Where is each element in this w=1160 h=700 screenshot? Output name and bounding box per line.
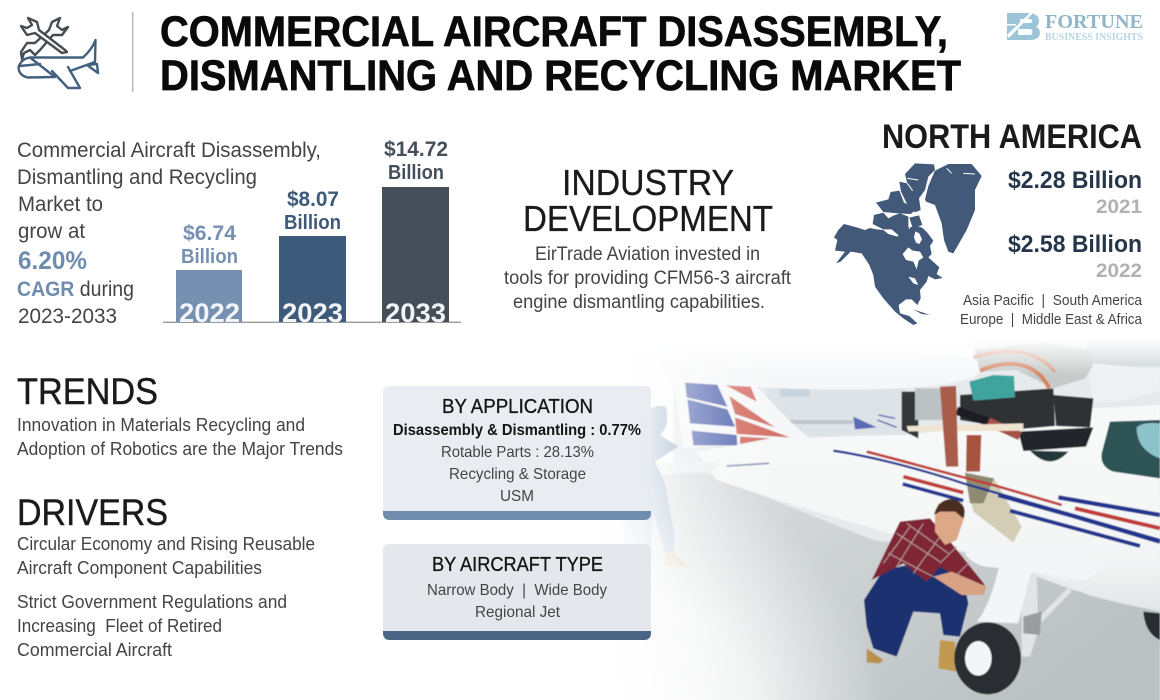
text block: market growth statement: CAGR during (17, 277, 134, 301)
text block: drivers: Commercial Aircraft (17, 639, 172, 660)
text block: market growth statement: 2023-2033 (18, 304, 117, 328)
bar: 2033: 2033 (385, 298, 446, 328)
fuselage stripes (833, 451, 1160, 540)
divider (132, 12, 133, 92)
panel: by aircraft type (383, 544, 651, 640)
text block: drivers (17, 533, 315, 660)
text block: drivers: Strict Government Regulations and (17, 591, 287, 612)
text block: industry development detail: engine dismantling capabilities. (513, 292, 765, 313)
bar: 2023: $8.07 (287, 188, 339, 211)
icon: wrenches crossed above an aircraft (19, 18, 98, 88)
heading: industry development: INDUSTRY (562, 162, 734, 203)
text block: market growth statement: Dismantling and Recycling (17, 165, 257, 189)
logo: Fortune Business Insights (1007, 11, 1143, 43)
text block: drivers: Aircraft Component Capabilities (17, 557, 262, 578)
bar: 2022: $6.74 (183, 222, 236, 245)
panel: by aircraft type: BY AIRCRAFT TYPE (432, 554, 603, 576)
text block: market growth statement: grow at (18, 219, 85, 243)
panel: by aircraft type: Narrow Body | Wide Body (427, 582, 607, 599)
text block: drivers: Circular Economy and Rising Reusable (17, 533, 315, 554)
text block: other regions: Asia Pacific | South America (963, 293, 1143, 309)
title: COMMERCIAL AIRCRAFT DISASSEMBLY, (160, 8, 948, 56)
panel: by application: USM (500, 488, 534, 505)
panel: by application: Recycling & Storage (449, 466, 586, 483)
stat: 2022 value: $2.58 Billion (1008, 231, 1142, 258)
panel: by application: Disassembly & Dismantling : 0.77% (393, 422, 641, 439)
text block: industry development detail: EirTrade Aviation invested in (535, 244, 760, 265)
photo: mechanic repairing a light aircraft in a hangar (597, 337, 1160, 700)
text block: market growth statement: 6.20% (18, 247, 87, 275)
text block: market growth statement (17, 138, 321, 328)
heading: trends: TRENDS (17, 371, 158, 412)
logo: Fortune Business Insights: FORTUNE (1045, 11, 1143, 33)
heading: drivers: DRIVERS (17, 492, 168, 533)
panel: by aircraft type: Regional Jet (475, 604, 561, 621)
text block: other regions (960, 293, 1143, 328)
bar: 2033: $14.72 (384, 138, 448, 161)
heading: industry development: DEVELOPMENT (523, 198, 773, 239)
text block: drivers: Increasing Fleet of Retired (17, 615, 222, 636)
woman in background (641, 406, 678, 553)
map: North America and Greenland (834, 163, 982, 325)
title: DISMANTLING AND RECYCLING MARKET (160, 52, 961, 100)
bar: 2033: Billion (388, 161, 444, 184)
text block: market growth statement: Market to (18, 192, 103, 216)
bar: 2033 (382, 138, 449, 328)
cockpit window (1101, 420, 1160, 478)
panel: by application (383, 386, 651, 520)
text block: trends (17, 414, 343, 459)
stat: 2021 value: 2021 (1096, 197, 1142, 218)
stat: 2022 value (1008, 231, 1142, 282)
stat: 2021 value: $2.28 Billion (1008, 167, 1142, 194)
text block: industry development detail (504, 244, 792, 313)
bar: 2022 (176, 222, 242, 328)
text block: trends: Adoption of Robotics are the Major Trends (17, 438, 343, 459)
panel: by application: BY APPLICATION (442, 396, 593, 418)
wheel fairing and strut (965, 552, 1000, 568)
text block: trends: Innovation in Materials Recycling and (17, 414, 305, 435)
text block: other regions: Europe | Middle East & Africa (960, 312, 1143, 328)
panel: by application: Rotable Parts : 28.13% (441, 444, 594, 461)
bar: 2023: Billion (284, 211, 341, 234)
text block: market growth statement: Commercial Aircraft Disassembly, (17, 138, 321, 162)
mechanic (864, 560, 968, 657)
logo: Fortune Business Insights: BUSINESS INSIGHTS (1045, 32, 1143, 43)
text block: industry development detail: tools for providing CFM56-3 aircraft (504, 268, 792, 289)
stat: 2022 value: 2022 (1096, 261, 1142, 282)
bar chart: market size 2022, 2023, 2033 (163, 138, 461, 328)
stat: 2021 value (1008, 167, 1142, 218)
bar: 2022: 2022 (179, 298, 240, 328)
engine bay (960, 388, 1055, 429)
title (160, 8, 961, 100)
bar: 2023 (279, 188, 346, 328)
heading: industry development (523, 162, 773, 239)
bar: 2022: Billion (181, 245, 238, 268)
bar: 2023: 2023 (282, 298, 343, 328)
